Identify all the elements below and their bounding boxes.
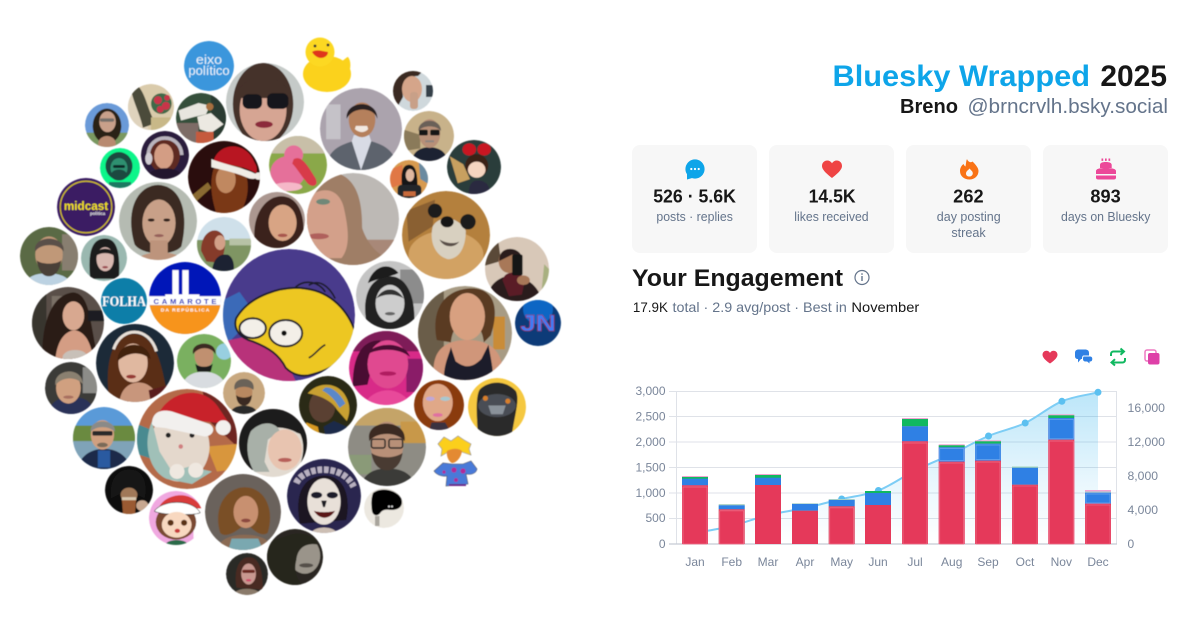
- left axis labels: [635, 384, 666, 551]
- avatar: midcast politica logo: política: [90, 211, 106, 216]
- avatar: masked bird: [176, 93, 226, 143]
- avatar: woman in dark room: [32, 287, 104, 364]
- avatar: FOLHA logo: FOLHA: [102, 294, 146, 310]
- month labels: Jun: [868, 555, 888, 569]
- icon: quotes: [1145, 350, 1160, 364]
- bar: Jan: [682, 476, 708, 544]
- avatar: Homer meme: [220, 249, 358, 384]
- engagement summary: total · 2.9 avg/post · Best in: [672, 299, 847, 315]
- stat card: days on Bluesky: days on Bluesky: [1061, 210, 1151, 224]
- profile name and handle: Breno: [900, 96, 958, 118]
- avatar: mirror selfie: [485, 237, 549, 301]
- bar: Aug: [939, 444, 965, 544]
- avatar: woman with golden curls: [205, 474, 281, 552]
- stat card: likes received: 14.5K: [809, 186, 856, 206]
- avatar: person with beer glass: [105, 466, 153, 514]
- stacked bars: [682, 414, 1111, 544]
- month labels: Dec: [1087, 555, 1109, 569]
- avatar: Camarote da Republica logo: [149, 262, 221, 336]
- month labels: [685, 555, 1109, 569]
- avatar: woman in the countryside: [197, 217, 251, 272]
- month labels: Jul: [907, 555, 923, 569]
- bar: Jun: [865, 491, 891, 544]
- avatar: cartoon kid with blue sweater: [434, 436, 477, 486]
- stat card: likes received: [769, 145, 894, 253]
- month labels: Nov: [1051, 555, 1072, 569]
- stat card: likes received: likes received: [794, 210, 869, 224]
- title: Bluesky Wrapped: [832, 60, 1090, 93]
- stat card: posts and replies: 526 · 5.6K: [653, 186, 736, 206]
- left axis labels: 500: [645, 511, 666, 525]
- avatar: goth illustration: [390, 160, 428, 199]
- icon: heart: [822, 160, 842, 178]
- engagement summary: 17.9K: [633, 299, 669, 315]
- bar: Mar: [755, 474, 781, 544]
- avatar: woman against grey wall: [118, 182, 198, 261]
- avatar: woman with sunglasses: [226, 63, 304, 145]
- avatar: woman covering face: [393, 71, 433, 111]
- avatar: black and white portrait: [356, 261, 424, 329]
- month labels: May: [830, 555, 853, 569]
- month labels: Oct: [1016, 555, 1035, 569]
- avatar: blonde woman close-up: [307, 173, 399, 267]
- icon: likes: [1042, 351, 1058, 364]
- month labels: Feb: [721, 555, 742, 569]
- left axis labels: 2,000: [635, 435, 666, 449]
- cumulative area: [695, 392, 1098, 544]
- right axis labels: 4,000: [1128, 503, 1158, 517]
- avatar: small furry dog: [402, 191, 490, 279]
- avatar: Kiki cartoon: [447, 140, 501, 195]
- avatar: black silhouette on cream: [364, 488, 404, 528]
- stat card: days on Bluesky: [1043, 145, 1168, 253]
- icon: replies: [1075, 350, 1093, 364]
- icon: flame: [960, 159, 978, 180]
- icon: cake: [1096, 158, 1116, 180]
- right axis labels: 0: [1128, 537, 1134, 551]
- left axis labels: 1,000: [635, 486, 666, 500]
- right axis labels: 8,000: [1128, 469, 1158, 483]
- avatar: woman with silver hair: [239, 409, 307, 477]
- right panel: [632, 60, 1168, 569]
- bar: Nov: [1048, 414, 1074, 544]
- stat card: day posting streak: day posting: [937, 210, 1001, 224]
- avatar: curly haired woman in black top: [418, 286, 512, 380]
- profile name and handle: @brncrvlh.bsky.social: [968, 96, 1168, 118]
- avatar cluster: [19, 36, 562, 596]
- stat card: day posting streak: [906, 145, 1031, 253]
- title: 2025: [1100, 60, 1167, 93]
- avatar: woman with clown makeup: [287, 459, 361, 533]
- stat card: posts and replies: posts · replies: [656, 210, 733, 224]
- avatar: flowers illustration: [128, 84, 174, 130]
- stat card: days on Bluesky: 893: [1090, 186, 1121, 206]
- avatar: Camarote da Republica logo: DA REPÚBLICA: [161, 307, 210, 313]
- icon: reposts: [1111, 348, 1125, 366]
- left axis labels: 1,500: [635, 460, 666, 474]
- bar: Jul: [902, 418, 928, 544]
- avatar: hamster with santa hat: [137, 389, 237, 489]
- avatar: JN logo: [515, 294, 561, 346]
- avatar: JN logo: JN: [520, 310, 556, 336]
- month labels: Sep: [977, 555, 999, 569]
- bar: Dec: [1085, 490, 1111, 544]
- right axis labels: [1128, 401, 1165, 551]
- month labels: Apr: [796, 555, 814, 569]
- avatar: man with beard and glasses: [348, 408, 426, 488]
- month labels: Aug: [941, 555, 962, 569]
- icon: speech bubble: [685, 159, 705, 180]
- avatar: dark monochrome portrait: [267, 529, 323, 585]
- avatar: emu with yellow background: [468, 378, 526, 437]
- bar: Apr: [792, 503, 818, 544]
- month labels: Jan: [685, 555, 705, 569]
- gridlines: [669, 391, 1117, 544]
- avatar: woman with headset: [141, 131, 189, 185]
- legend icons: [1042, 348, 1160, 366]
- month labels: Mar: [758, 555, 778, 569]
- stat card: day posting streak: 262: [953, 186, 984, 206]
- avatar: FOLHA logo: [101, 278, 147, 324]
- avatar: midcast politica logo: midcast: [64, 199, 108, 213]
- avatar: woman with black hair: [81, 235, 127, 281]
- avatar: singer with santa hat: [188, 141, 262, 215]
- right axis labels: 12,000: [1128, 435, 1165, 449]
- right axis labels: 16,000: [1128, 401, 1165, 415]
- avatar: green portrait: [100, 148, 140, 189]
- left axis labels: 2,500: [635, 410, 666, 424]
- stat card: posts and replies: [632, 145, 757, 253]
- avatar: cartoon girl with santa hat: [149, 491, 203, 545]
- heading: your engagement: Your Engagement: [632, 265, 843, 292]
- engagement summary: November: [851, 299, 920, 315]
- engagement summary: [633, 299, 920, 315]
- bar: Feb: [719, 504, 745, 544]
- avatar: rubber duck: [303, 38, 351, 92]
- avatar: woman with red glasses: [226, 553, 268, 595]
- avatar: woman with bangs: [96, 324, 174, 402]
- avatar: man with grey hair: [45, 362, 97, 415]
- avatar: woman with glasses: [85, 103, 129, 151]
- avatar: Camarote da Republica logo: CAMAROTE: [154, 297, 216, 306]
- avatar: older man with black glasses: [404, 111, 454, 162]
- icon: info: [855, 270, 869, 284]
- avatar: woman with colourful eyeshadow: [414, 380, 464, 431]
- cumulative line: [695, 389, 1102, 533]
- avatar: woman with long dark hair: [249, 192, 305, 248]
- avatar: eixo politico: político: [188, 64, 230, 78]
- avatar: bearded man outdoors: [177, 334, 232, 389]
- bar: Sep: [975, 440, 1001, 544]
- avatar: midcast politica logo: [57, 178, 115, 236]
- avatar: eixo politico: eixo: [196, 53, 222, 67]
- avatar: man with beanie: [223, 372, 265, 415]
- combo chart: monthly engagement: [635, 384, 1165, 569]
- avatar: man with beard: [20, 227, 78, 286]
- left axis labels: 3,000: [635, 384, 666, 398]
- avatar: smiling man in grey sweater: [320, 88, 402, 170]
- avatar: man with glasses by the river: [73, 407, 135, 471]
- left axis labels: 0: [659, 537, 666, 551]
- avatar: eixo politico: [184, 41, 234, 91]
- avatar: pink toned portrait: [349, 331, 423, 405]
- stat card: day posting streak: streak: [951, 226, 986, 240]
- bar: Oct: [1012, 466, 1038, 544]
- bar: May: [829, 499, 855, 544]
- avatar: pink tongue monster: [269, 136, 327, 194]
- avatar: pearl earring painting: [299, 376, 357, 434]
